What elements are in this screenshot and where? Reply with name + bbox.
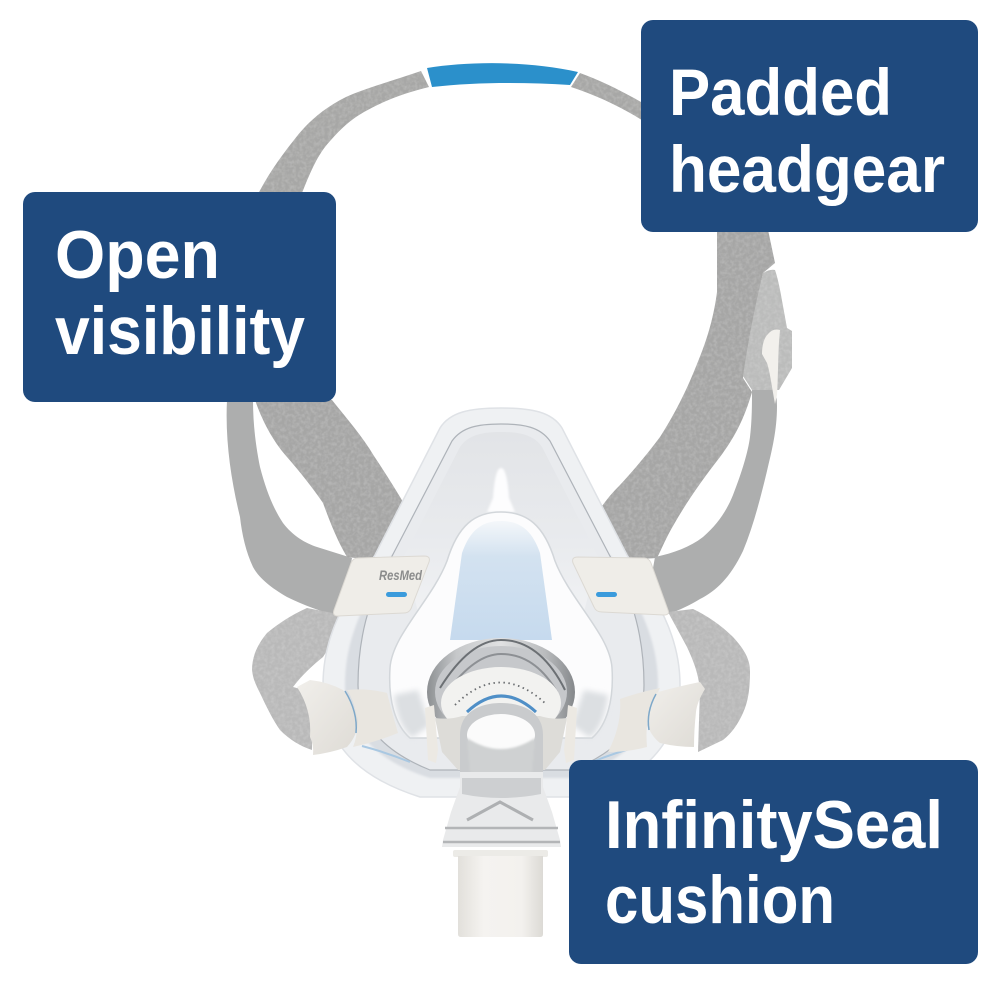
right side tab [608, 688, 660, 752]
callout: padded headgear: Padded [669, 55, 892, 129]
blue headgear pad [427, 63, 578, 87]
left yoke clip [425, 705, 438, 763]
tube flange [453, 850, 548, 857]
callout: InfinitySeal cushion: InfinitySeal [605, 787, 943, 863]
right clip [573, 557, 668, 615]
right side adjuster pad [743, 270, 792, 390]
mask outer cushion shell [323, 408, 680, 797]
left side tab [347, 689, 398, 747]
callout: open visibility [23, 192, 336, 402]
callout: padded headgear: headgear [669, 132, 945, 206]
callout: InfinitySeal cushion: cushion [605, 862, 835, 938]
right buckle blue edge [648, 694, 656, 730]
inner cushion [390, 512, 612, 738]
callout: open visibility: Open [55, 217, 220, 293]
right blue marker [596, 592, 617, 597]
ResMed logo: ResMed [379, 567, 422, 583]
left smooth strap [227, 400, 352, 617]
blue seal accent [362, 746, 640, 762]
mask inner frame [358, 424, 644, 770]
elbow yoke band [435, 716, 567, 770]
top headgear strap right [571, 73, 648, 124]
callout: open visibility: visibility [55, 293, 305, 369]
left buckle blue edge [345, 691, 356, 733]
left blue marker [386, 592, 407, 597]
right upper textured strap [598, 225, 775, 560]
right adjuster buckle [762, 330, 780, 404]
callout: padded headgear [641, 20, 978, 232]
left lower loop strap [252, 608, 342, 750]
upper lens [404, 432, 598, 620]
headgear and mask illustration [227, 63, 792, 937]
left buckle [297, 680, 358, 755]
nasal highlight [487, 468, 515, 512]
inner cushion shade right [572, 690, 608, 738]
right lower loop strap [668, 609, 750, 752]
right smooth strap [650, 356, 777, 614]
top headgear strap left [256, 71, 429, 198]
elbow connector [442, 772, 561, 847]
right buckle [647, 682, 705, 747]
swivel ring [427, 638, 575, 746]
inner cushion shade left [394, 690, 430, 738]
left clip [334, 556, 429, 616]
mask grey side band [345, 555, 658, 778]
callout: InfinitySeal cushion [569, 760, 978, 964]
right yoke clip [564, 705, 577, 763]
air tube [458, 856, 543, 937]
elbow arch [460, 703, 543, 787]
blue lens area [450, 521, 552, 640]
left textured strap [255, 400, 406, 560]
